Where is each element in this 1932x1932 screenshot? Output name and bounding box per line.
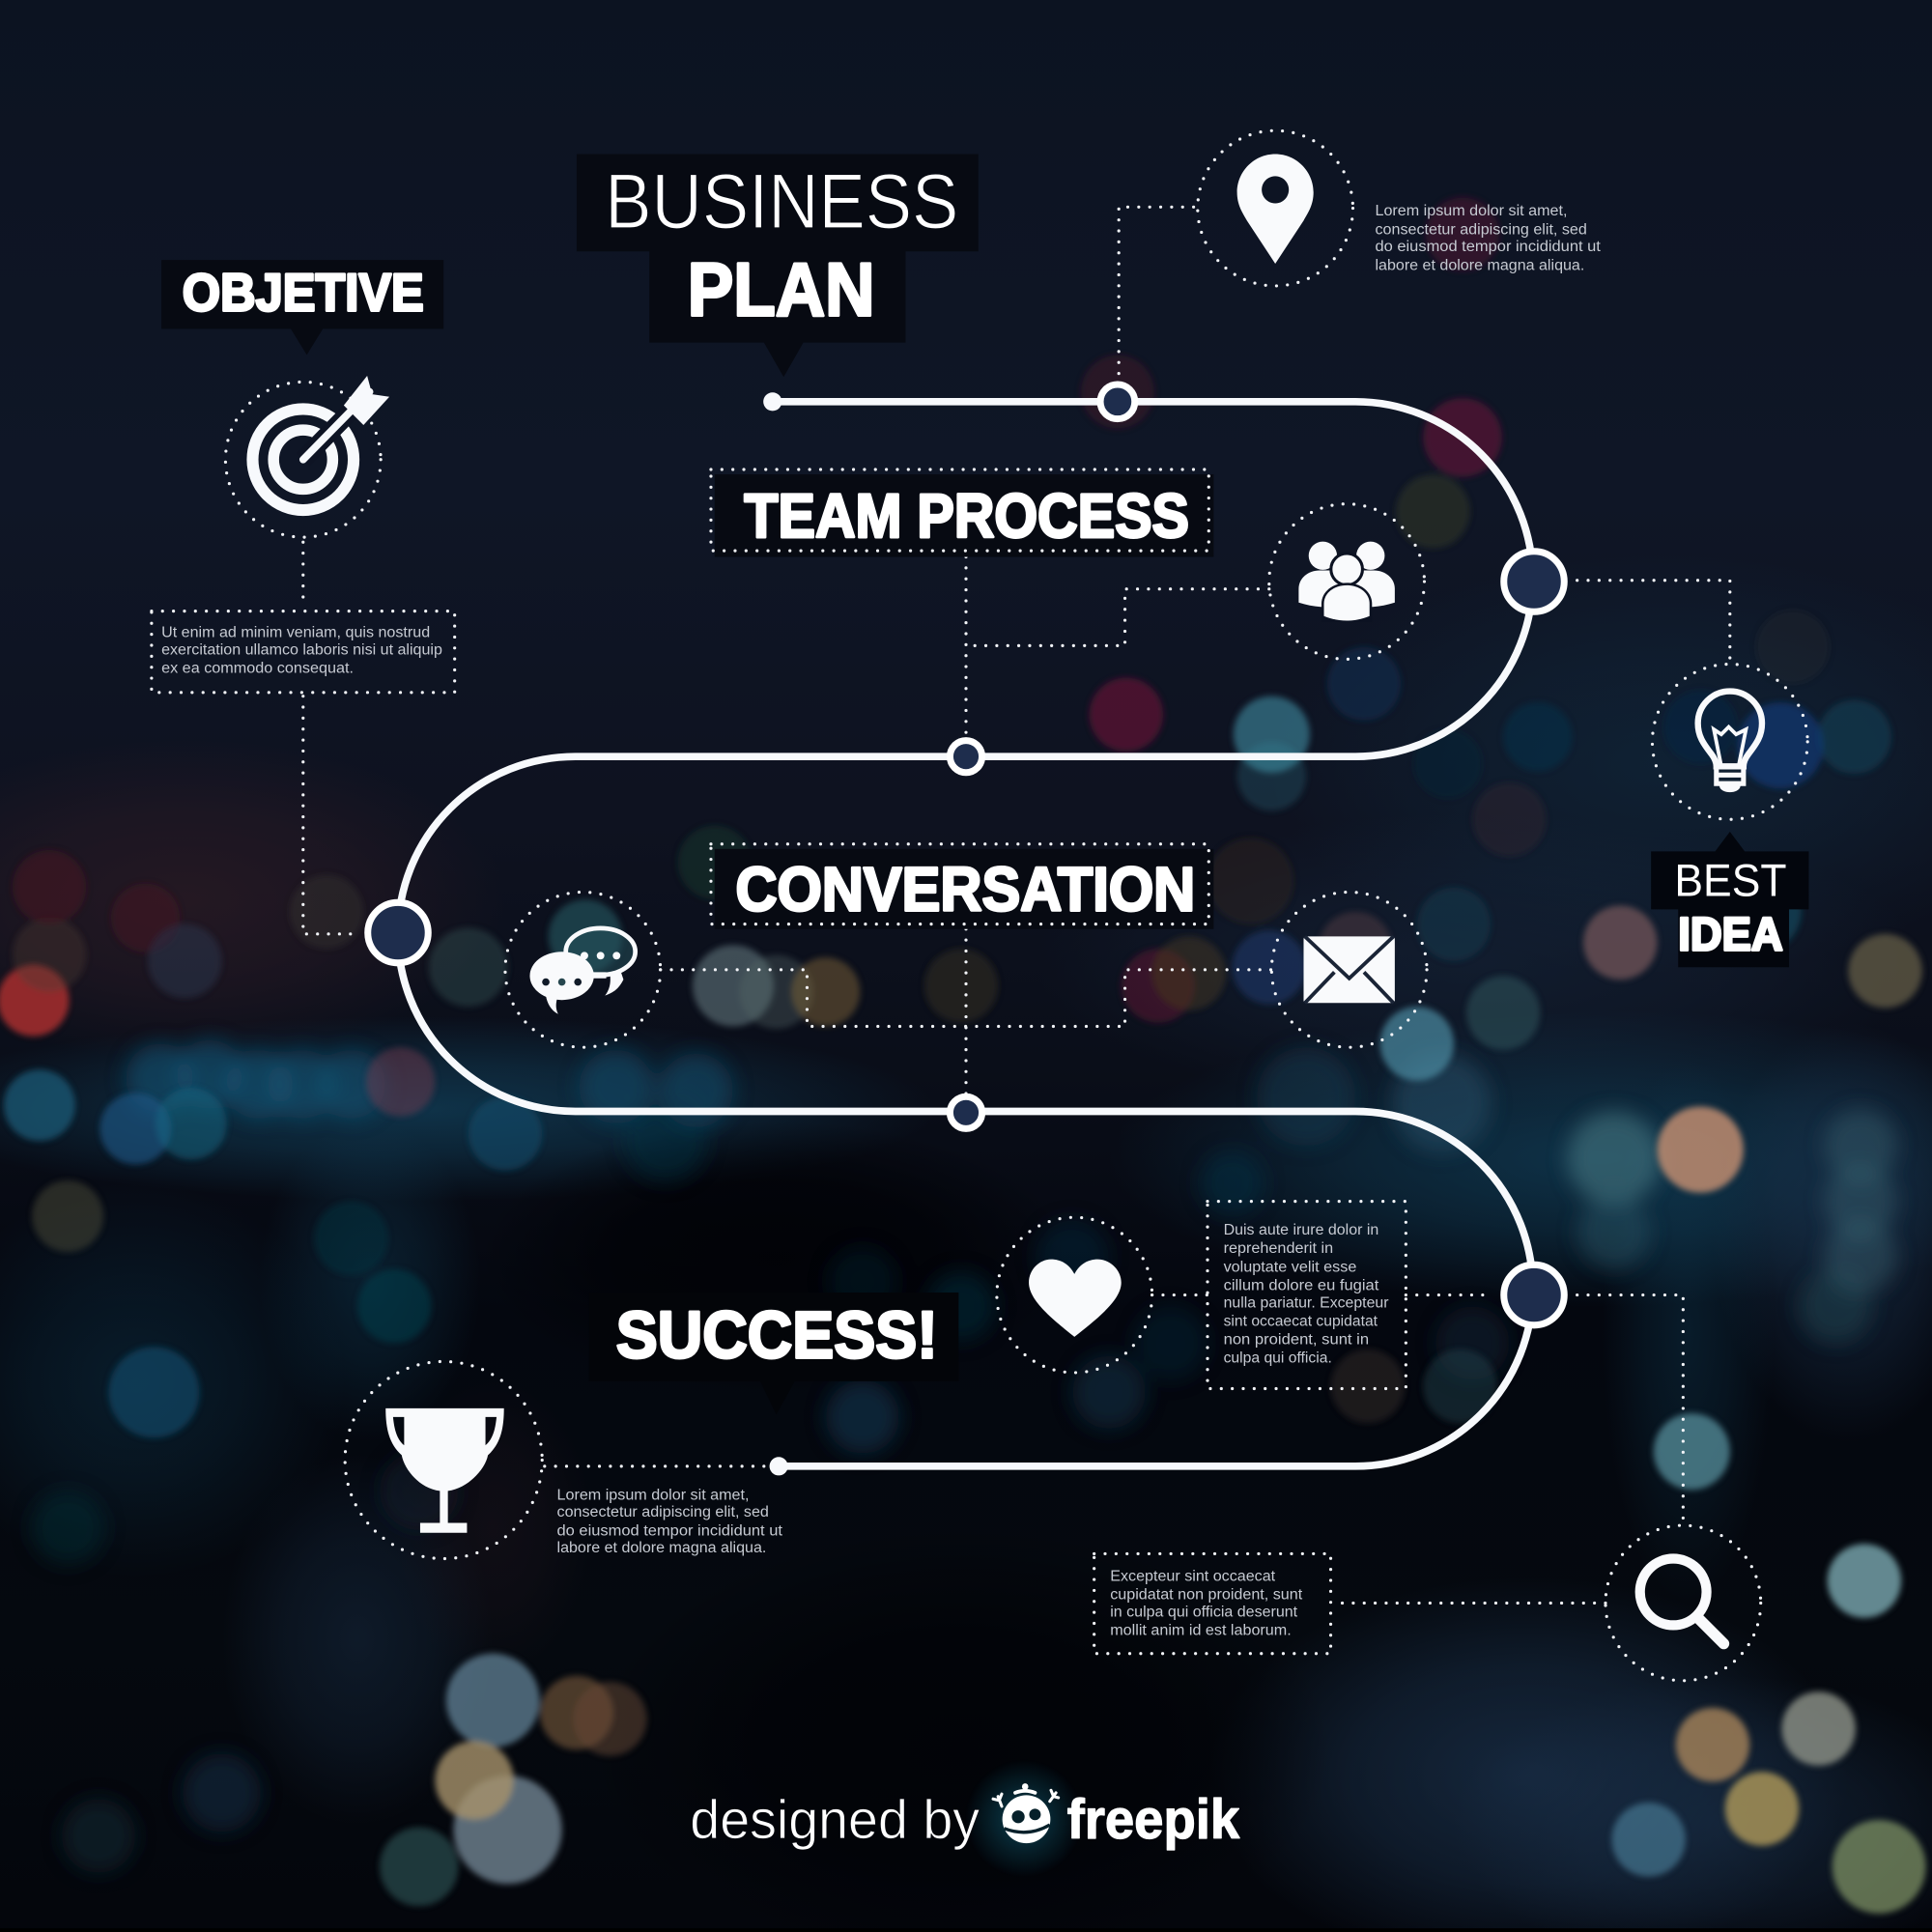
dotted connector lines [303, 207, 1730, 1603]
text block: heart: reprehenderit in [1224, 1240, 1333, 1257]
label: best idea [1651, 832, 1808, 967]
icon: light bulb [1652, 665, 1807, 819]
text block: heart: sint occaecat cupidatat [1224, 1313, 1378, 1329]
icon: heart [997, 1217, 1152, 1373]
credit: designed by freepik [690, 1783, 1239, 1851]
label: objetive [161, 260, 443, 355]
text block: magnifier: in culpa qui officia deserunt [1110, 1604, 1298, 1620]
label: success: SUCCESS! [616, 1298, 938, 1373]
text block: magnifier: Excepteur sint occaecat [1110, 1568, 1276, 1584]
text block: location: labore et dolore magna aliqua. [1375, 257, 1584, 273]
icon: location pin [1198, 130, 1353, 286]
main roadmap path [368, 384, 1564, 1475]
text block: location: Lorem ipsum dolor sit amet, [1375, 203, 1567, 219]
label: success [589, 1293, 958, 1414]
credit: designed by freepik: designed by [690, 1789, 980, 1850]
title: business plan: PLAN [688, 249, 875, 332]
text block: heart: culpa qui officia. [1224, 1350, 1332, 1367]
text block: heart: cillum dolore eu fugiat [1224, 1277, 1379, 1293]
text block: objective: exercitation ullamco laboris nisi ut aliquip [161, 641, 442, 658]
text block: magnifier [1094, 1553, 1331, 1654]
icon: team [1269, 504, 1424, 659]
label: team process: TEAM PROCESS [744, 481, 1189, 551]
text block: trophy [557, 1487, 783, 1556]
text block: heart [1208, 1202, 1406, 1389]
title: business plan [577, 154, 979, 377]
text block: objective [152, 611, 455, 693]
text block: location: consectetur adipiscing elit, sed [1375, 221, 1587, 238]
icon: trophy [345, 1361, 542, 1559]
text block: trophy: Lorem ipsum dolor sit amet, [557, 1487, 750, 1503]
text block: trophy: labore et dolore magna aliqua. [557, 1540, 766, 1556]
label: best idea: BEST [1674, 855, 1786, 906]
text block: heart: nulla pariatur. Excepteur [1224, 1294, 1388, 1311]
icon: target [225, 376, 389, 537]
label: objetive: OBJETIVE [183, 262, 424, 322]
text block: objective: ex ea commodo consequat. [161, 660, 354, 676]
credit: designed by freepik: freepik [1067, 1789, 1239, 1851]
icon: magnifier [1605, 1525, 1761, 1681]
title: business plan: BUSINESS [605, 158, 958, 245]
text block: magnifier: mollit anim id est laborum. [1110, 1623, 1292, 1639]
label: conversation: CONVERSATION [735, 855, 1195, 924]
text block: trophy: do eiusmod tempor incididunt ut [557, 1522, 783, 1539]
icon: chat bubbles [505, 892, 661, 1047]
text block: magnifier: cupidatat non proident, sunt [1110, 1587, 1303, 1604]
text block: objective: Ut enim ad minim veniam, quis nostrud [161, 624, 430, 640]
text block: location [1375, 203, 1602, 273]
text block: trophy: consectetur adipiscing elit, sed [557, 1504, 769, 1520]
text block: heart: voluptate velit esse [1224, 1259, 1357, 1275]
icon: envelope [1271, 892, 1427, 1047]
text block: heart: Duis aute irure dolor in [1224, 1222, 1378, 1238]
text block: heart: non proident, sunt in [1224, 1332, 1369, 1349]
text block: location: do eiusmod tempor incididunt ut [1375, 239, 1602, 255]
label: best idea: IDEA [1678, 908, 1783, 960]
